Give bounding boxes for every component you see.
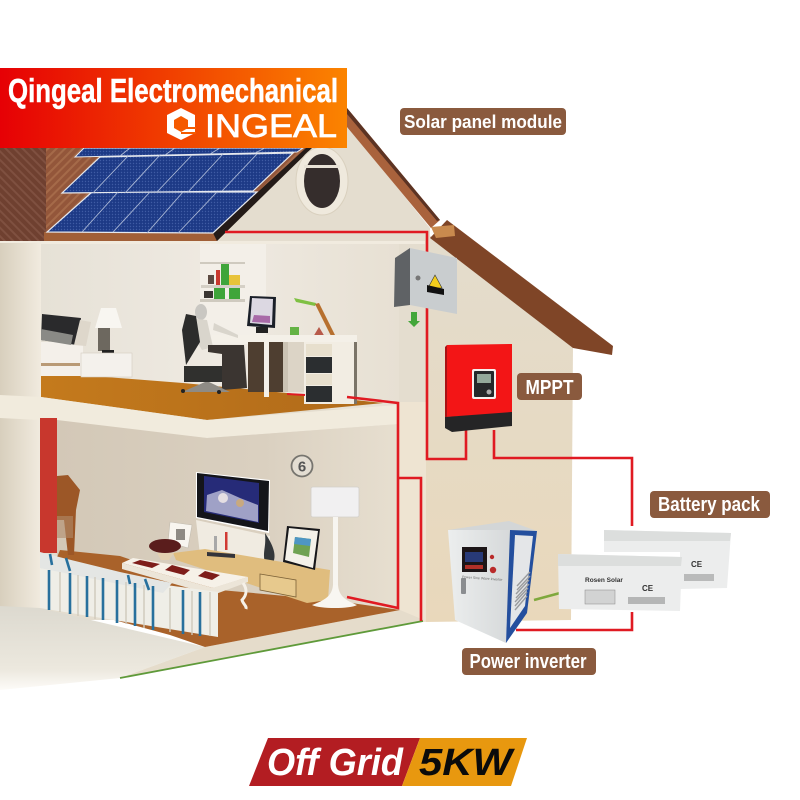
controller base xyxy=(445,412,512,432)
red column xyxy=(40,418,57,553)
upper room wall xyxy=(41,244,399,409)
lower room floor xyxy=(40,550,400,647)
title badge: Off Grid 5KW xyxy=(249,738,527,786)
back battery marks: CE xyxy=(691,560,703,569)
wire: MPPT to battery xyxy=(494,430,632,526)
red cable segment xyxy=(287,394,305,395)
inverter front xyxy=(448,530,510,643)
floor slab xyxy=(0,395,400,438)
floor lamp xyxy=(311,487,359,608)
number 6 badge xyxy=(292,456,312,476)
side wall strip xyxy=(399,402,426,622)
picture frame small xyxy=(168,522,192,548)
label: power inverter: Power inverter xyxy=(470,651,587,673)
vent slats xyxy=(515,572,530,610)
wooden chair xyxy=(57,475,80,555)
front battery body xyxy=(558,554,682,611)
box front xyxy=(410,248,457,314)
power inverter xyxy=(448,521,537,643)
inverter side panel xyxy=(510,535,533,628)
computer monitor xyxy=(247,296,276,333)
gable wall xyxy=(0,125,430,620)
banner background xyxy=(0,68,347,148)
flower bowl xyxy=(149,539,181,560)
bedside lamp xyxy=(95,308,122,353)
green ground line xyxy=(120,621,423,678)
back battery body xyxy=(604,530,731,589)
battery brand: Rosen Solar xyxy=(585,577,623,584)
lower room furniture xyxy=(40,456,359,637)
bookshelf xyxy=(200,262,245,303)
ground right strip xyxy=(120,610,424,678)
upper roof band xyxy=(347,108,440,228)
box label xyxy=(427,285,444,295)
inverter top xyxy=(448,521,537,531)
right outer wall xyxy=(425,232,573,622)
shelf wall xyxy=(200,244,266,344)
inverter display xyxy=(462,547,496,573)
back battery xyxy=(604,530,731,589)
bed xyxy=(41,314,91,376)
badge text left: Off Grid xyxy=(267,742,404,784)
media stand white back xyxy=(196,520,270,565)
MPPT controller xyxy=(445,344,512,432)
green arrow xyxy=(408,312,420,327)
desk xyxy=(212,335,357,404)
vase xyxy=(264,533,275,564)
lower room wall xyxy=(57,420,400,610)
battery symbols xyxy=(628,597,665,604)
green cable xyxy=(534,593,560,600)
desk lamp xyxy=(290,298,337,339)
nightstand xyxy=(81,353,132,377)
battery certification: CE xyxy=(642,584,654,593)
label: MPPT xyxy=(517,373,582,400)
warning triangle xyxy=(428,275,442,288)
wall tv xyxy=(196,472,270,533)
left pillar xyxy=(0,243,41,618)
back battery lid xyxy=(604,530,731,541)
coffee table xyxy=(122,558,248,609)
solar panels xyxy=(47,148,303,233)
controller display xyxy=(472,369,496,399)
number 6 badge: 6 xyxy=(298,458,306,476)
round window xyxy=(296,147,348,215)
router xyxy=(214,536,217,551)
wire: upper room to lower room xyxy=(347,397,398,608)
wire: distribution branch xyxy=(398,478,421,621)
box side xyxy=(394,248,410,307)
knob xyxy=(416,276,420,280)
badge orange part xyxy=(402,738,527,786)
battery spec box xyxy=(585,590,615,604)
small cable xyxy=(225,532,228,550)
striped sofa xyxy=(40,552,218,637)
badge text right: 5KW xyxy=(419,742,515,784)
combiner box xyxy=(394,248,457,327)
picture frame large xyxy=(283,526,320,570)
logo hexagon xyxy=(167,108,196,140)
house xyxy=(0,108,613,690)
red wiring xyxy=(225,232,632,630)
tv stand xyxy=(173,549,330,603)
label: MPPT: MPPT xyxy=(526,377,574,399)
wire: panels to combiner and MPPT xyxy=(225,232,466,459)
upper room furniture xyxy=(41,262,357,404)
office chair xyxy=(181,314,230,394)
badge red part xyxy=(249,738,420,786)
inverter caption: Power Sine Wave Inverter xyxy=(462,575,503,582)
label: solar panel module: Solar panel module xyxy=(404,111,562,132)
roof band dark edge xyxy=(347,108,440,221)
label: battery pack: Battery pack xyxy=(658,494,761,516)
front battery xyxy=(558,554,682,611)
roof band wood end xyxy=(431,225,455,238)
person at desk xyxy=(195,304,247,390)
upper room floor xyxy=(41,375,383,420)
wire: battery to inverter xyxy=(516,612,632,630)
banner title: Qingeal Electromechanical xyxy=(8,72,338,109)
controller left edge xyxy=(445,345,447,417)
door handle xyxy=(461,578,466,594)
banner xyxy=(0,68,347,148)
back battery symbols xyxy=(684,574,714,581)
logo wordmark: INGEAL xyxy=(205,108,337,144)
inverter side xyxy=(506,530,537,643)
lower roof band xyxy=(430,220,613,355)
front battery lid xyxy=(558,554,682,566)
eave strip xyxy=(0,241,425,244)
controller body xyxy=(447,344,512,417)
left roof xyxy=(0,148,312,241)
ground left xyxy=(0,606,205,690)
